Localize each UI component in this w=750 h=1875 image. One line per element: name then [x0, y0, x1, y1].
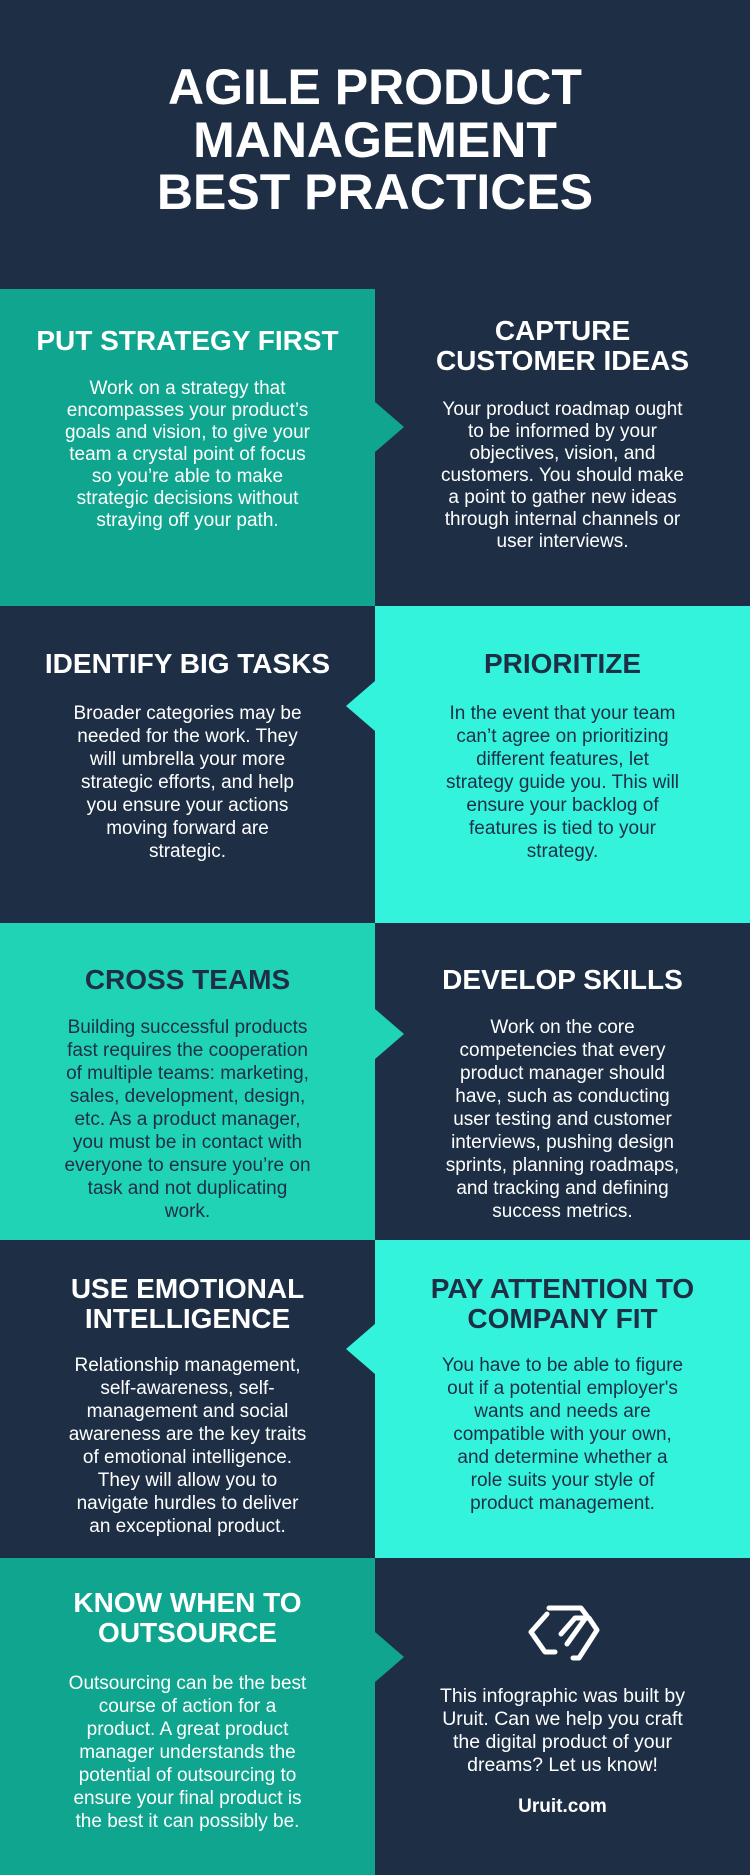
arrow: row 1 — [375, 402, 404, 452]
text: capture customer ideas: Your product roadmap ought — [442, 399, 683, 420]
panel: uruit — [375, 1558, 750, 1875]
heading: prioritize: PRIORITIZE — [484, 648, 641, 679]
panel: identify big tasks — [0, 606, 375, 924]
text: use emotional intelligence: self-awareness, self- — [100, 1378, 275, 1399]
text: outsource: Outsourcing can be the best — [69, 1673, 306, 1694]
text: cross teams: etc. As a product manager, — [74, 1109, 301, 1130]
heading: use emotional intelligence: USE EMOTIONAL — [71, 1273, 304, 1304]
text: put strategy first: straying off your path. — [96, 510, 279, 531]
text: put strategy first — [65, 378, 310, 531]
text: identify big tasks: strategic efforts, and help — [81, 772, 294, 793]
text: identify big tasks: will umbrella your more — [90, 749, 285, 770]
text: use emotional intelligence: They will allow you to — [98, 1470, 277, 1491]
text: develop skills: product manager should — [460, 1063, 665, 1084]
panel: cross teams — [0, 923, 375, 1241]
text: develop skills: success metrics. — [492, 1201, 633, 1222]
text: prioritize: features is tied to your — [469, 818, 656, 839]
heading: outsource — [73, 1587, 302, 1648]
text: put strategy first: so you’re able to make — [92, 466, 283, 487]
text: identify big tasks — [73, 703, 302, 862]
text: cross teams — [64, 1017, 311, 1222]
text: identify big tasks: Broader categories may be — [73, 703, 302, 724]
text: cross teams: fast requires the cooperation — [67, 1040, 308, 1061]
text: develop skills — [446, 1017, 679, 1222]
text: prioritize — [446, 703, 679, 862]
panel: develop skills — [375, 923, 750, 1241]
heading: use emotional intelligence: INTELLIGENCE — [85, 1303, 290, 1334]
text: company fit: product management. — [470, 1493, 655, 1514]
panel: know when to outsource — [0, 1558, 375, 1875]
text: capture customer ideas: to be informed by your — [468, 421, 657, 442]
text: use emotional intelligence: management and social — [87, 1401, 288, 1422]
text: cross teams: task and not duplicating — [88, 1178, 287, 1199]
text: identify big tasks: needed for the work. They — [77, 726, 298, 747]
text: cross teams: everyone to ensure you’re on — [64, 1155, 311, 1176]
text: cross teams: Building successful products — [68, 1017, 307, 1038]
text: company fit: and determine whether a — [457, 1447, 668, 1468]
text: cross teams: sales, development, design, — [70, 1086, 305, 1107]
heading: company fit — [431, 1273, 694, 1334]
text: use emotional intelligence: navigate hurdles to deliver — [77, 1493, 298, 1514]
text: capture customer ideas: a point to gather new ideas — [448, 487, 677, 508]
text: develop skills: sprints, planning roadmaps, — [446, 1155, 679, 1176]
text: outsource: the best it can possibly be. — [76, 1811, 299, 1832]
panel: use emotional intelligence — [0, 1240, 375, 1558]
title: BEST PRACTICES — [157, 164, 593, 220]
text: put strategy first: goals and vision, to give your — [65, 422, 310, 443]
heading: outsource: KNOW WHEN TO — [73, 1587, 302, 1618]
text: uruit.com: Uruit.com — [518, 1796, 607, 1817]
text: outsource — [69, 1673, 306, 1832]
text: identify big tasks: strategic. — [149, 841, 226, 862]
text: put strategy first: strategic decisions without — [77, 488, 298, 509]
heading: cross teams: CROSS TEAMS — [85, 964, 290, 995]
text: uruit credit: Uruit. Can we help you craft — [442, 1708, 683, 1730]
text: put strategy first: encompasses your product’s — [67, 400, 308, 421]
arrow: row 5 — [375, 1632, 404, 1682]
heading: capture customer ideas: CAPTURE — [495, 315, 630, 346]
text: develop skills: interviews, pushing design — [451, 1132, 674, 1153]
text: identify big tasks: moving forward are — [106, 818, 269, 839]
arrow: row 4 — [346, 1324, 375, 1374]
text: prioritize: ensure your backlog of — [466, 795, 659, 816]
text: use emotional intelligence: an exceptional product. — [89, 1516, 286, 1537]
icon: uruit logo — [528, 1606, 600, 1660]
text: use emotional intelligence: awareness are the key traits — [69, 1424, 306, 1445]
text: develop skills: and tracking and defining — [456, 1178, 669, 1199]
text: capture customer ideas: through internal channels or — [445, 509, 680, 530]
title — [157, 59, 593, 220]
text: company fit: wants and needs are — [474, 1401, 651, 1422]
heading: identify big tasks: IDENTIFY BIG TASKS — [45, 648, 330, 679]
text: outsource: ensure your final product is — [73, 1788, 302, 1809]
text: company fit: role suits your style of — [471, 1470, 654, 1491]
arrow: row 2 — [346, 681, 375, 731]
text: uruit credit — [440, 1685, 685, 1776]
text: develop skills: have, such as conducting — [455, 1086, 670, 1107]
text: use emotional intelligence: of emotional intelligence. — [83, 1447, 292, 1468]
text: cross teams: you must be in contact with — [73, 1132, 302, 1153]
heading: capture customer ideas — [436, 315, 689, 376]
text: uruit credit: dreams? Let us know! — [467, 1754, 658, 1776]
text: develop skills: user testing and customer — [453, 1109, 672, 1130]
text: develop skills: Work on the core — [490, 1017, 635, 1038]
panel: put strategy first — [0, 289, 375, 607]
text: uruit credit: the digital product of your — [453, 1731, 672, 1753]
title: MANAGEMENT — [193, 112, 557, 168]
heading: company fit: PAY ATTENTION TO — [431, 1273, 694, 1304]
title: AGILE PRODUCT — [168, 59, 582, 115]
text: prioritize: can’t agree on prioritizing — [456, 726, 669, 747]
text: capture customer ideas — [441, 399, 684, 552]
text: use emotional intelligence: Relationship management, — [74, 1355, 301, 1376]
text: identify big tasks: you ensure your actions — [87, 795, 288, 816]
panel: pay attention to company fit — [375, 1240, 750, 1558]
text: cross teams: work. — [165, 1201, 210, 1222]
text: uruit credit: This infographic was built by — [440, 1685, 685, 1707]
text: develop skills: competencies that every — [460, 1040, 665, 1061]
text: prioritize: different features, let — [476, 749, 649, 770]
heading: put strategy first: PUT STRATEGY FIRST — [36, 325, 339, 356]
text: capture customer ideas: customers. You should make — [441, 465, 684, 486]
text: prioritize: strategy. — [527, 841, 598, 862]
text: outsource: potential of outsourcing to — [79, 1765, 296, 1786]
heading: company fit: COMPANY FIT — [467, 1303, 658, 1334]
text: use emotional intelligence — [69, 1355, 306, 1537]
text: prioritize: In the event that your team — [449, 703, 676, 724]
text: company fit: compatible with your own, — [453, 1424, 672, 1445]
text: capture customer ideas: user interviews. — [496, 531, 628, 552]
panel: prioritize — [375, 606, 750, 924]
text: outsource: product. A great product — [87, 1719, 288, 1740]
text: outsource: course of action for a — [99, 1696, 276, 1717]
heading: capture customer ideas: CUSTOMER IDEAS — [436, 345, 689, 376]
arrow: row 3 — [375, 1009, 404, 1059]
heading: develop skills: DEVELOP SKILLS — [442, 964, 683, 995]
text: cross teams: of multiple teams: marketing, — [66, 1063, 309, 1084]
text: company fit: out if a potential employer's — [447, 1378, 678, 1399]
panel: capture customer ideas — [375, 289, 750, 607]
heading: outsource: OUTSOURCE — [98, 1617, 277, 1648]
text: put strategy first: team a crystal point of focus — [69, 444, 306, 465]
text: put strategy first: Work on a strategy that — [89, 378, 286, 399]
text: prioritize: strategy guide you. This will — [446, 772, 679, 793]
text: company fit: You have to be able to figure — [442, 1355, 683, 1376]
text: company fit — [442, 1355, 683, 1514]
text: outsource: manager understands the — [79, 1742, 296, 1763]
text: capture customer ideas: objectives, vision, and — [470, 443, 655, 464]
heading: use emotional intelligence — [71, 1273, 304, 1334]
